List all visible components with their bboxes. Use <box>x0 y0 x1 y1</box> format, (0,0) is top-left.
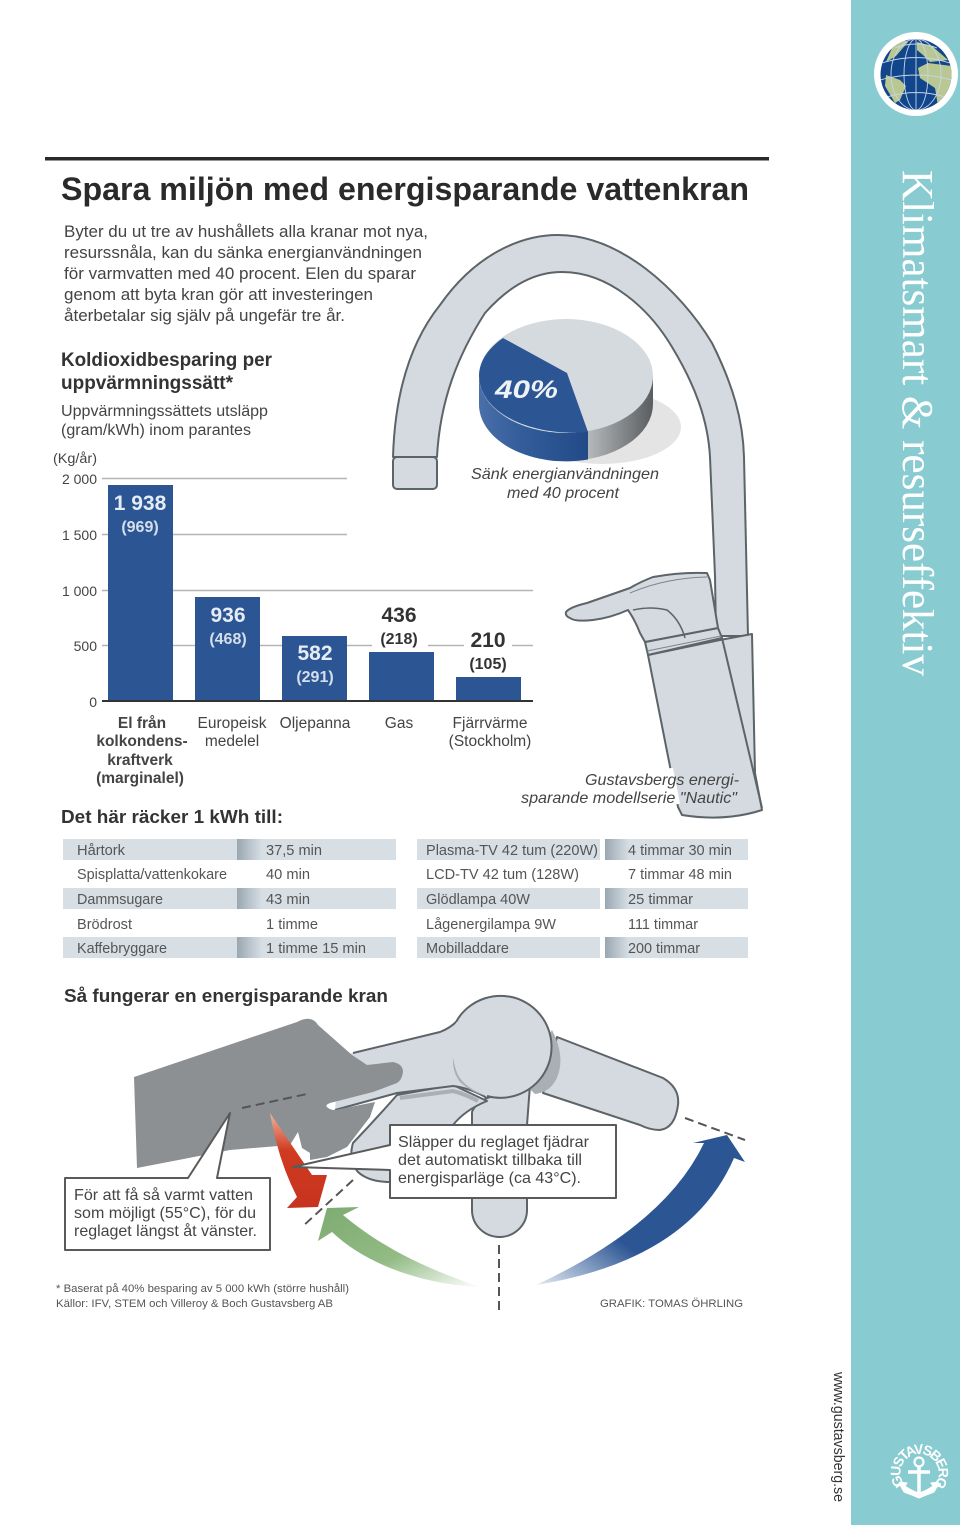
table: left: 1 timme 15 min <box>266 940 366 957</box>
table: left: Hårtork <box>77 842 125 859</box>
faucet caption: sparande modellserie "Nautic" <box>521 790 738 807</box>
table: left: 37,5 min <box>266 842 322 859</box>
table: left: Spisplatta/vattenkokare <box>77 866 227 883</box>
faucet caption: Gustavsbergs energi- <box>585 772 739 789</box>
bar values: (218) <box>380 631 418 648</box>
table: right: Plasma-TV 42 tum (220W) <box>426 842 598 859</box>
caption gap in body edge <box>671 768 678 804</box>
arrow: red <box>270 1113 327 1208</box>
callout: right: det automatiskt tillbaka till <box>398 1152 582 1169</box>
arrow: blue <box>536 1135 745 1285</box>
faucet nozzle <box>393 457 437 489</box>
sidebar title: Klimatsmart & resurseffektiv <box>893 170 942 676</box>
website url: www.gustavsberg.se <box>830 1371 846 1502</box>
category labels: medelel <box>205 733 259 750</box>
bar values: 582 <box>297 642 333 665</box>
bar values: 936 <box>210 604 246 627</box>
arrow: green <box>318 1207 480 1287</box>
callout: right: energisparläge (ca 43°C). <box>398 1170 581 1187</box>
table: left: Kaffebryggare <box>77 940 167 957</box>
dashed guide lines <box>242 1094 307 1108</box>
category labels: Gas <box>385 715 413 732</box>
category labels: Europeisk <box>198 715 267 732</box>
sidebar <box>851 0 960 1525</box>
pie caption: med 40 procent <box>507 485 620 502</box>
intro text: återbetalar sig själv på ungefär tre år. <box>64 307 345 325</box>
faucet handle <box>566 573 718 642</box>
top rule <box>45 157 769 160</box>
chart heading: Koldioxidbesparing per <box>61 350 273 371</box>
bar chart: (Kg/år) <box>53 450 97 466</box>
table heading: Det här räcker 1 kWh till: <box>61 806 283 827</box>
table: left: Dammsugare <box>77 891 163 908</box>
table: right <box>417 839 748 958</box>
callout: right: Släpper du reglaget fjädrar <box>398 1134 590 1151</box>
bar values: (969) <box>121 519 159 536</box>
table: left: 43 min <box>266 891 310 908</box>
intro text: genom att byta kran gör att investeringen <box>64 286 373 304</box>
intro text <box>64 223 428 325</box>
table: right: 111 timmar <box>628 916 698 933</box>
table: right: 4 timmar 30 min <box>628 842 732 859</box>
icon: globe <box>874 32 958 116</box>
category labels: kraftverk <box>107 752 173 769</box>
bar values: 210 <box>470 629 506 652</box>
table: left: Brödrost <box>77 916 133 933</box>
faucet body <box>648 634 762 818</box>
y axis labels: 1 500 <box>62 527 97 543</box>
illustration: faucet <box>393 235 762 818</box>
table: right: 7 timmar 48 min <box>628 866 732 883</box>
how it works heading: Så fungerar en energisparande kran <box>64 985 388 1006</box>
faucet collar <box>645 628 722 655</box>
table: right: 200 timmar <box>628 940 700 957</box>
icon: Gustavsberg logo: GUSTAVSBERG <box>890 1444 948 1488</box>
faucet spout <box>393 235 748 636</box>
callout: left: För att få så varmt vatten <box>74 1186 253 1204</box>
bar values: (291) <box>296 669 334 686</box>
pie caption: Sänk energianvändningen <box>471 466 659 483</box>
footnote <box>56 1283 349 1310</box>
category labels: El från <box>118 715 166 732</box>
category labels: Oljepanna <box>280 715 351 732</box>
intro text: Byter du ut tre av hushållets alla kranar mot nya, <box>64 223 428 241</box>
y axis labels: 500 <box>74 638 97 654</box>
footnote: Källor: IFV, STEM och Villeroy & Boch Gustavsberg AB <box>56 1298 333 1310</box>
callout: left <box>65 1113 270 1250</box>
intro text: för varmvatten med 40 procent. Elen du sparar <box>64 265 417 283</box>
bar values <box>114 492 512 686</box>
table: left <box>63 839 396 958</box>
y axis labels: 0 <box>89 694 97 710</box>
lever: right <box>543 1037 678 1130</box>
table: right: Glödlampa 40W <box>426 891 531 908</box>
lever: downward <box>472 1085 530 1237</box>
pie label: 40% <box>494 376 558 404</box>
knob shadow <box>520 1030 560 1094</box>
y axis labels: 1 000 <box>62 583 97 599</box>
table: right: 25 timmar <box>628 891 693 908</box>
footnote: * Baserat på 40% besparing av 5 000 kWh (större hushåll) <box>56 1283 349 1295</box>
credit: GRAFIK: TOMAS ÖHRLING <box>600 1298 743 1310</box>
bar values: (105) <box>469 656 507 673</box>
y axis labels <box>62 471 97 710</box>
bar values: (468) <box>209 631 247 648</box>
callout: left: reglaget längst åt vänster. <box>74 1222 257 1240</box>
bar values: 436 <box>381 604 417 627</box>
table: left: 40 min <box>266 866 310 883</box>
table: right: Lågenergilampa 9W <box>426 916 557 933</box>
hand <box>134 1019 403 1168</box>
callout: right <box>293 1125 616 1198</box>
y axis labels: 2 000 <box>62 471 97 487</box>
table: right: LCD-TV 42 tum (128W) <box>426 866 579 883</box>
lever: left arm <box>335 1022 487 1110</box>
table: left: 1 timme <box>266 916 318 933</box>
title: Spara miljön med energisparande vattenkran <box>61 171 749 207</box>
callout: left: som möjligt (55°C), för du <box>74 1205 256 1222</box>
chart subheading <box>61 403 268 439</box>
chart subheading: Uppvärmningssättets utsläpp <box>61 403 268 420</box>
category labels: Fjärrvärme <box>453 715 527 732</box>
intro text: resurssnåla, kan du sänka energianvändningen <box>64 244 422 262</box>
chart heading: uppvärmningssätt* <box>61 373 234 394</box>
bar chart <box>53 450 533 787</box>
bars <box>108 485 521 701</box>
category labels <box>96 715 531 787</box>
faucet caption <box>521 772 739 807</box>
category labels: (Stockholm) <box>449 733 531 750</box>
table: right: Mobilladdare <box>426 940 509 957</box>
category labels: kolkondens- <box>96 733 188 750</box>
bar values: 1 938 <box>114 492 167 515</box>
chart subheading: (gram/kWh) inom parantes <box>61 422 251 439</box>
pie caption <box>471 466 659 502</box>
pie chart: 40 percent <box>479 319 681 464</box>
lever: lower left <box>351 1085 487 1182</box>
category labels: (marginalel) <box>96 770 184 787</box>
knob <box>450 996 552 1098</box>
illustration: faucet from above with hand <box>134 996 745 1315</box>
chart heading <box>61 350 273 394</box>
